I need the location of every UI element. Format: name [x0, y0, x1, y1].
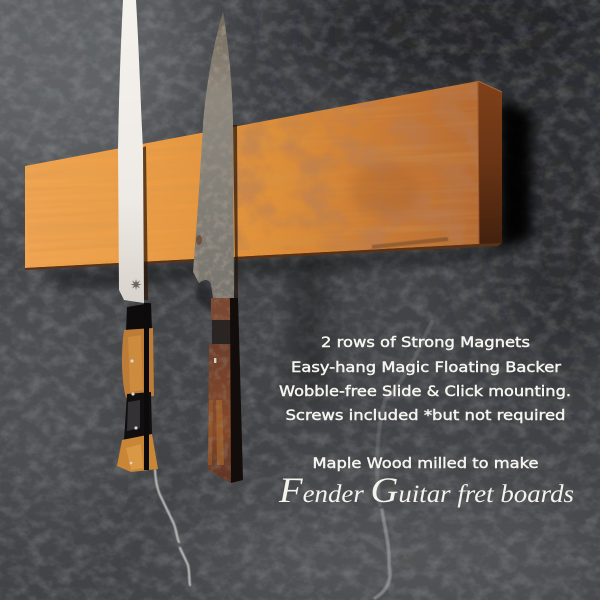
feature list text: Screws included *but not required — [286, 408, 566, 424]
burl wood butt — [117, 434, 158, 472]
main wood scale — [208, 344, 231, 483]
knife 1 star mark: ✷ — [130, 276, 142, 294]
bolster — [126, 303, 152, 332]
knife 1 shadow — [142, 146, 148, 300]
maple wood line: Maple Wood milled to make — [312, 456, 539, 472]
rack corner highlight — [478, 81, 502, 92]
black inlay — [124, 392, 152, 440]
pins — [130, 359, 134, 363]
rack side face — [478, 81, 502, 244]
knife 1 blade — [118, 0, 144, 303]
pin — [214, 358, 216, 363]
feature list text: Wobble-free Slide & Click mounting. — [279, 384, 571, 400]
rack shadow on wall — [45, 100, 532, 402]
knife 2 shadow — [233, 125, 238, 298]
knife 1: slim white slicer — [117, 0, 158, 472]
feature list text — [279, 335, 571, 424]
knife 2 patina — [193, 24, 234, 298]
knife 2 blade — [193, 12, 234, 298]
feature list text: Easy-hang Magic Floating Backer — [291, 360, 561, 376]
spine — [144, 303, 149, 470]
knife 2: rustic patina gyuto — [190, 10, 243, 486]
knife 1 handle — [117, 303, 158, 472]
rack bottom edge — [25, 243, 502, 270]
feature list text: 2 rows of Strong Magnets — [321, 335, 530, 351]
script heading: Fender Guitar fret boards: Fender Guitar fret boards — [278, 470, 574, 510]
black spine — [230, 298, 243, 483]
burl wood scale — [122, 328, 154, 398]
marble veins on wall — [155, 322, 432, 598]
maple wood magnetic rack — [25, 80, 502, 270]
rack front face — [25, 81, 479, 268]
knife 2 handle — [208, 298, 243, 483]
ferrule wood — [211, 298, 231, 320]
wood grain — [25, 82, 478, 263]
collar gap — [212, 320, 231, 344]
